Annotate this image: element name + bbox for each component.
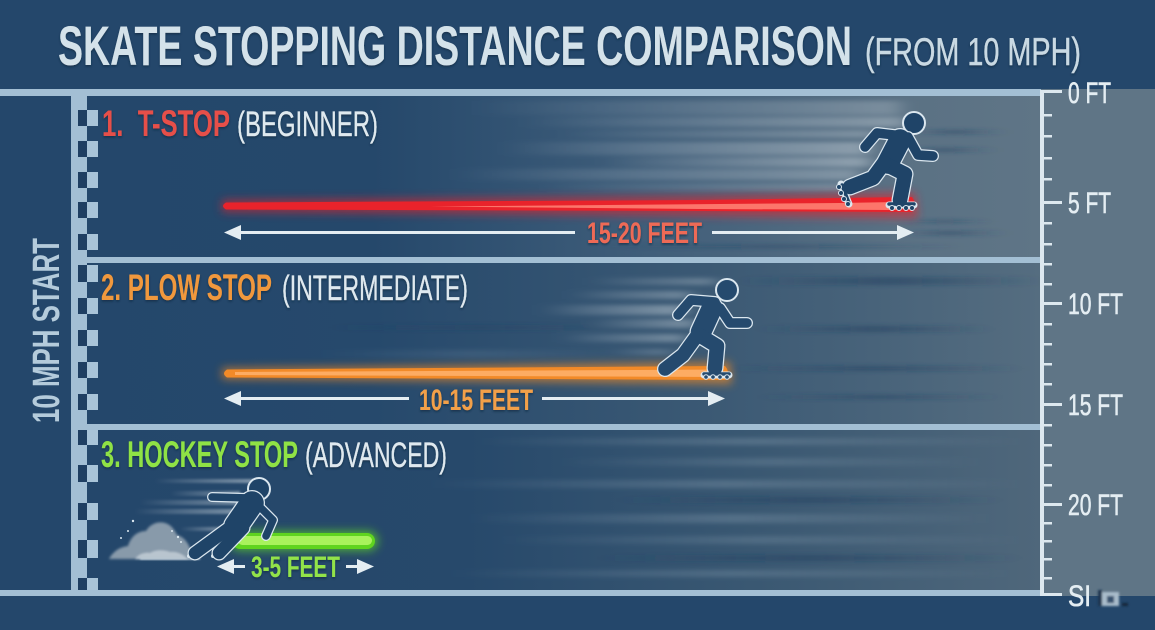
panel: hockey stop lane bbox=[87, 427, 1040, 594]
distance ruler: 0 FT bbox=[1068, 77, 1111, 110]
section 2: distance arrow: 10-15 FEET bbox=[419, 384, 533, 417]
section 2: orange distance bar bbox=[222, 362, 732, 384]
section 3: hockey stop heading: (ADVANCED) bbox=[305, 436, 447, 475]
section 2: distance arrow bbox=[224, 384, 725, 417]
start label: 10 MPH START bbox=[26, 238, 68, 423]
section 2: plow stop heading: (INTERMEDIATE) bbox=[282, 269, 468, 308]
section 3: spray cloud bbox=[109, 520, 200, 560]
section 3: hockey stop heading: 3. HOCKEY STOP bbox=[101, 434, 298, 475]
speed streaks: hockey stop bbox=[430, 438, 1020, 577]
section 2: skater icon bbox=[665, 279, 747, 379]
lane dividers bbox=[0, 89, 1041, 596]
section 1: t-stop heading: 1. T-STOP bbox=[102, 103, 230, 144]
section 3: distance arrow: 3-5 FEET bbox=[251, 551, 340, 584]
title: (FROM 10 MPH) bbox=[865, 31, 1081, 74]
section 1: skater icon bbox=[836, 112, 933, 210]
section 3: green distance bar bbox=[230, 531, 378, 551]
section 1: red distance bar bbox=[222, 193, 918, 218]
panel: t-stop lane bbox=[87, 96, 1040, 260]
distance ruler: SI bbox=[1068, 580, 1091, 613]
speed streaks: plow stop bbox=[320, 277, 1040, 399]
distance ruler: 15 FT bbox=[1068, 389, 1123, 422]
section 3: skater icon bbox=[189, 478, 273, 556]
speed streaks: t-stop bbox=[450, 101, 1000, 248]
section 1: t-stop heading bbox=[102, 103, 378, 144]
distance ruler bbox=[1040, 77, 1128, 613]
distance ruler: 5 FT bbox=[1068, 187, 1111, 220]
panel: plow stop lane bbox=[87, 260, 1040, 427]
distance ruler: 20 FT bbox=[1068, 489, 1123, 522]
section 2: plow stop heading: 2. PLOW STOP bbox=[101, 267, 272, 308]
section 1: distance arrow: 15-20 FEET bbox=[587, 217, 702, 250]
section 1: distance arrow bbox=[224, 217, 914, 250]
section 3: skater motion streaks bbox=[135, 479, 255, 531]
distance ruler: 10 FT bbox=[1068, 288, 1123, 321]
start line with checker pattern bbox=[71, 89, 98, 596]
section 1: t-stop heading: (BEGINNER) bbox=[237, 105, 378, 144]
ruler background bbox=[1040, 89, 1155, 596]
